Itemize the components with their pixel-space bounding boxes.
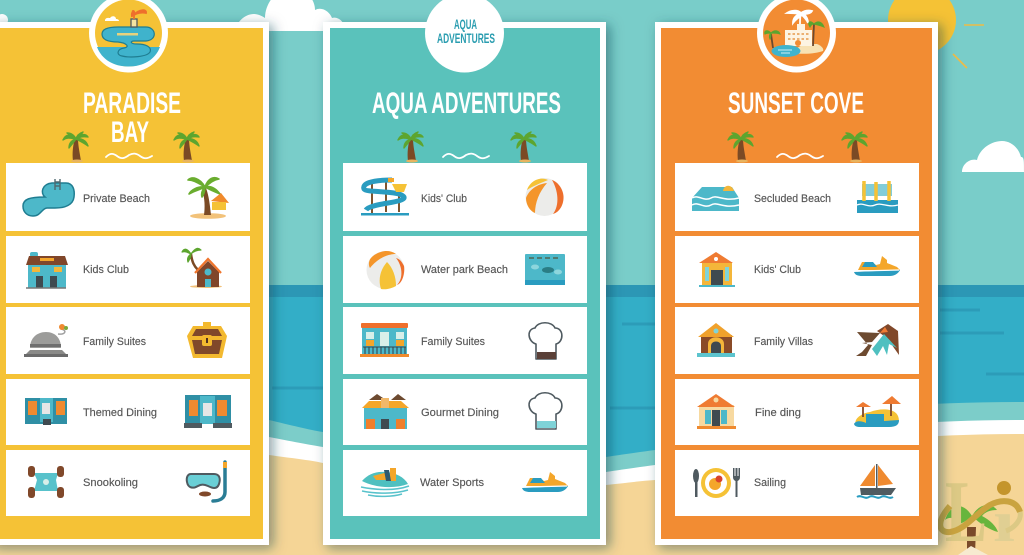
icon: restaurant [362,394,409,429]
text: Kids' Club [421,193,467,205]
icon: house portico [697,394,736,429]
icon: palm and birdhouse [182,248,222,288]
panel: Paradise Bay [0,0,269,545]
wave [106,154,152,158]
text: Snookoling [83,477,138,489]
badge: Paradise Bay slide [89,0,168,72]
icon: chef hat teal band [529,393,562,429]
text: Secluded Beach [754,193,831,205]
palm left [63,132,88,162]
icon: beach waves [692,186,739,211]
palm right [842,132,867,162]
row: Kids' Club [343,163,587,231]
row: Family Suites [343,307,587,374]
text: Themed Dining [83,407,157,419]
icon: villa [697,323,735,357]
badge: Sunset Cove resort [757,0,836,72]
panel: Aqua Adventures [323,0,606,545]
row: Secluded Beach [675,163,919,231]
row: Family Suites [6,307,250,374]
row: Snookoling [6,450,250,516]
heading: Paradise Bay: PARADISE [83,87,181,120]
heading: Sunset Cove: SUNSET COVE [728,87,864,120]
icon: cottage teal [699,252,735,287]
palm right [174,132,199,162]
icon: water gate [857,181,898,213]
sun [888,0,984,68]
icon: palm and hut [188,178,229,219]
icon: float with handles [28,466,64,498]
icon: treasure chest [187,322,227,358]
icon: pool [23,179,74,216]
palm left [728,132,753,162]
row: Themed Dining [6,379,250,445]
row: Sailing [675,450,919,516]
text: Family Villas [754,336,813,348]
sea [0,285,1024,475]
text: Water Sports [420,477,484,489]
text: Fine ding [755,407,801,419]
row: Gourmet Dining [343,379,587,445]
cloud: right [962,141,1024,172]
row: Fine ding [675,379,919,445]
icon: hotel balcony [360,323,409,357]
wave [777,154,823,158]
icon: jet ski [854,256,900,276]
text: Family Suites [421,336,485,348]
badge: Aqua Adventures: AQUA [454,17,477,32]
row: Kids' Club [675,236,919,303]
text: Water park Beach [421,264,508,276]
text: Gourmet Dining [421,407,499,419]
row: Private Beach [6,163,250,231]
icon: jet ski [522,472,568,492]
heading: Paradise Bay: BAY [111,116,149,149]
icon: beach ball orange [526,178,564,216]
row: Water park Beach [343,236,587,303]
icon: plate and cutlery [693,468,740,498]
icon: shop [26,252,68,288]
text: Private Beach [83,193,150,205]
icon: chef hat dark band [529,323,562,359]
beach [0,402,1024,555]
icon: water slide [361,178,409,216]
panel: Sunset Cove [655,0,938,545]
icon: dining front large [184,395,232,428]
icon: dining front small [25,398,67,425]
row: Water Sports [343,450,587,516]
icon: cloche [24,324,68,357]
icon: snorkel mask [187,462,227,501]
badge: Aqua Adventures: ADVENTURES [437,31,495,46]
icon: pool map [525,254,565,285]
text: Sailing [754,477,786,489]
icon: boat on waves [361,468,409,496]
text: Kids Club [83,264,129,276]
palm left [398,132,423,162]
logo: ı [993,489,1015,554]
text: Kids' Club [754,264,801,276]
text: Family Suites [83,336,146,348]
row: Family Villas [675,307,919,374]
palm right [511,132,536,162]
row: Kids Club [6,236,250,303]
heading: Aqua Adventures: AQUA ADVENTURES [372,87,561,120]
icon: sailboat [857,464,896,498]
cloud: top [0,0,346,31]
icon: cliff shelter [856,324,899,356]
icon: beach ball yellow [366,251,404,289]
badge: Aqua Adventures [425,0,504,72]
heading: Paradise Bay [83,87,181,149]
wave [443,154,489,158]
icon: lagoon umbrellas [854,396,901,427]
